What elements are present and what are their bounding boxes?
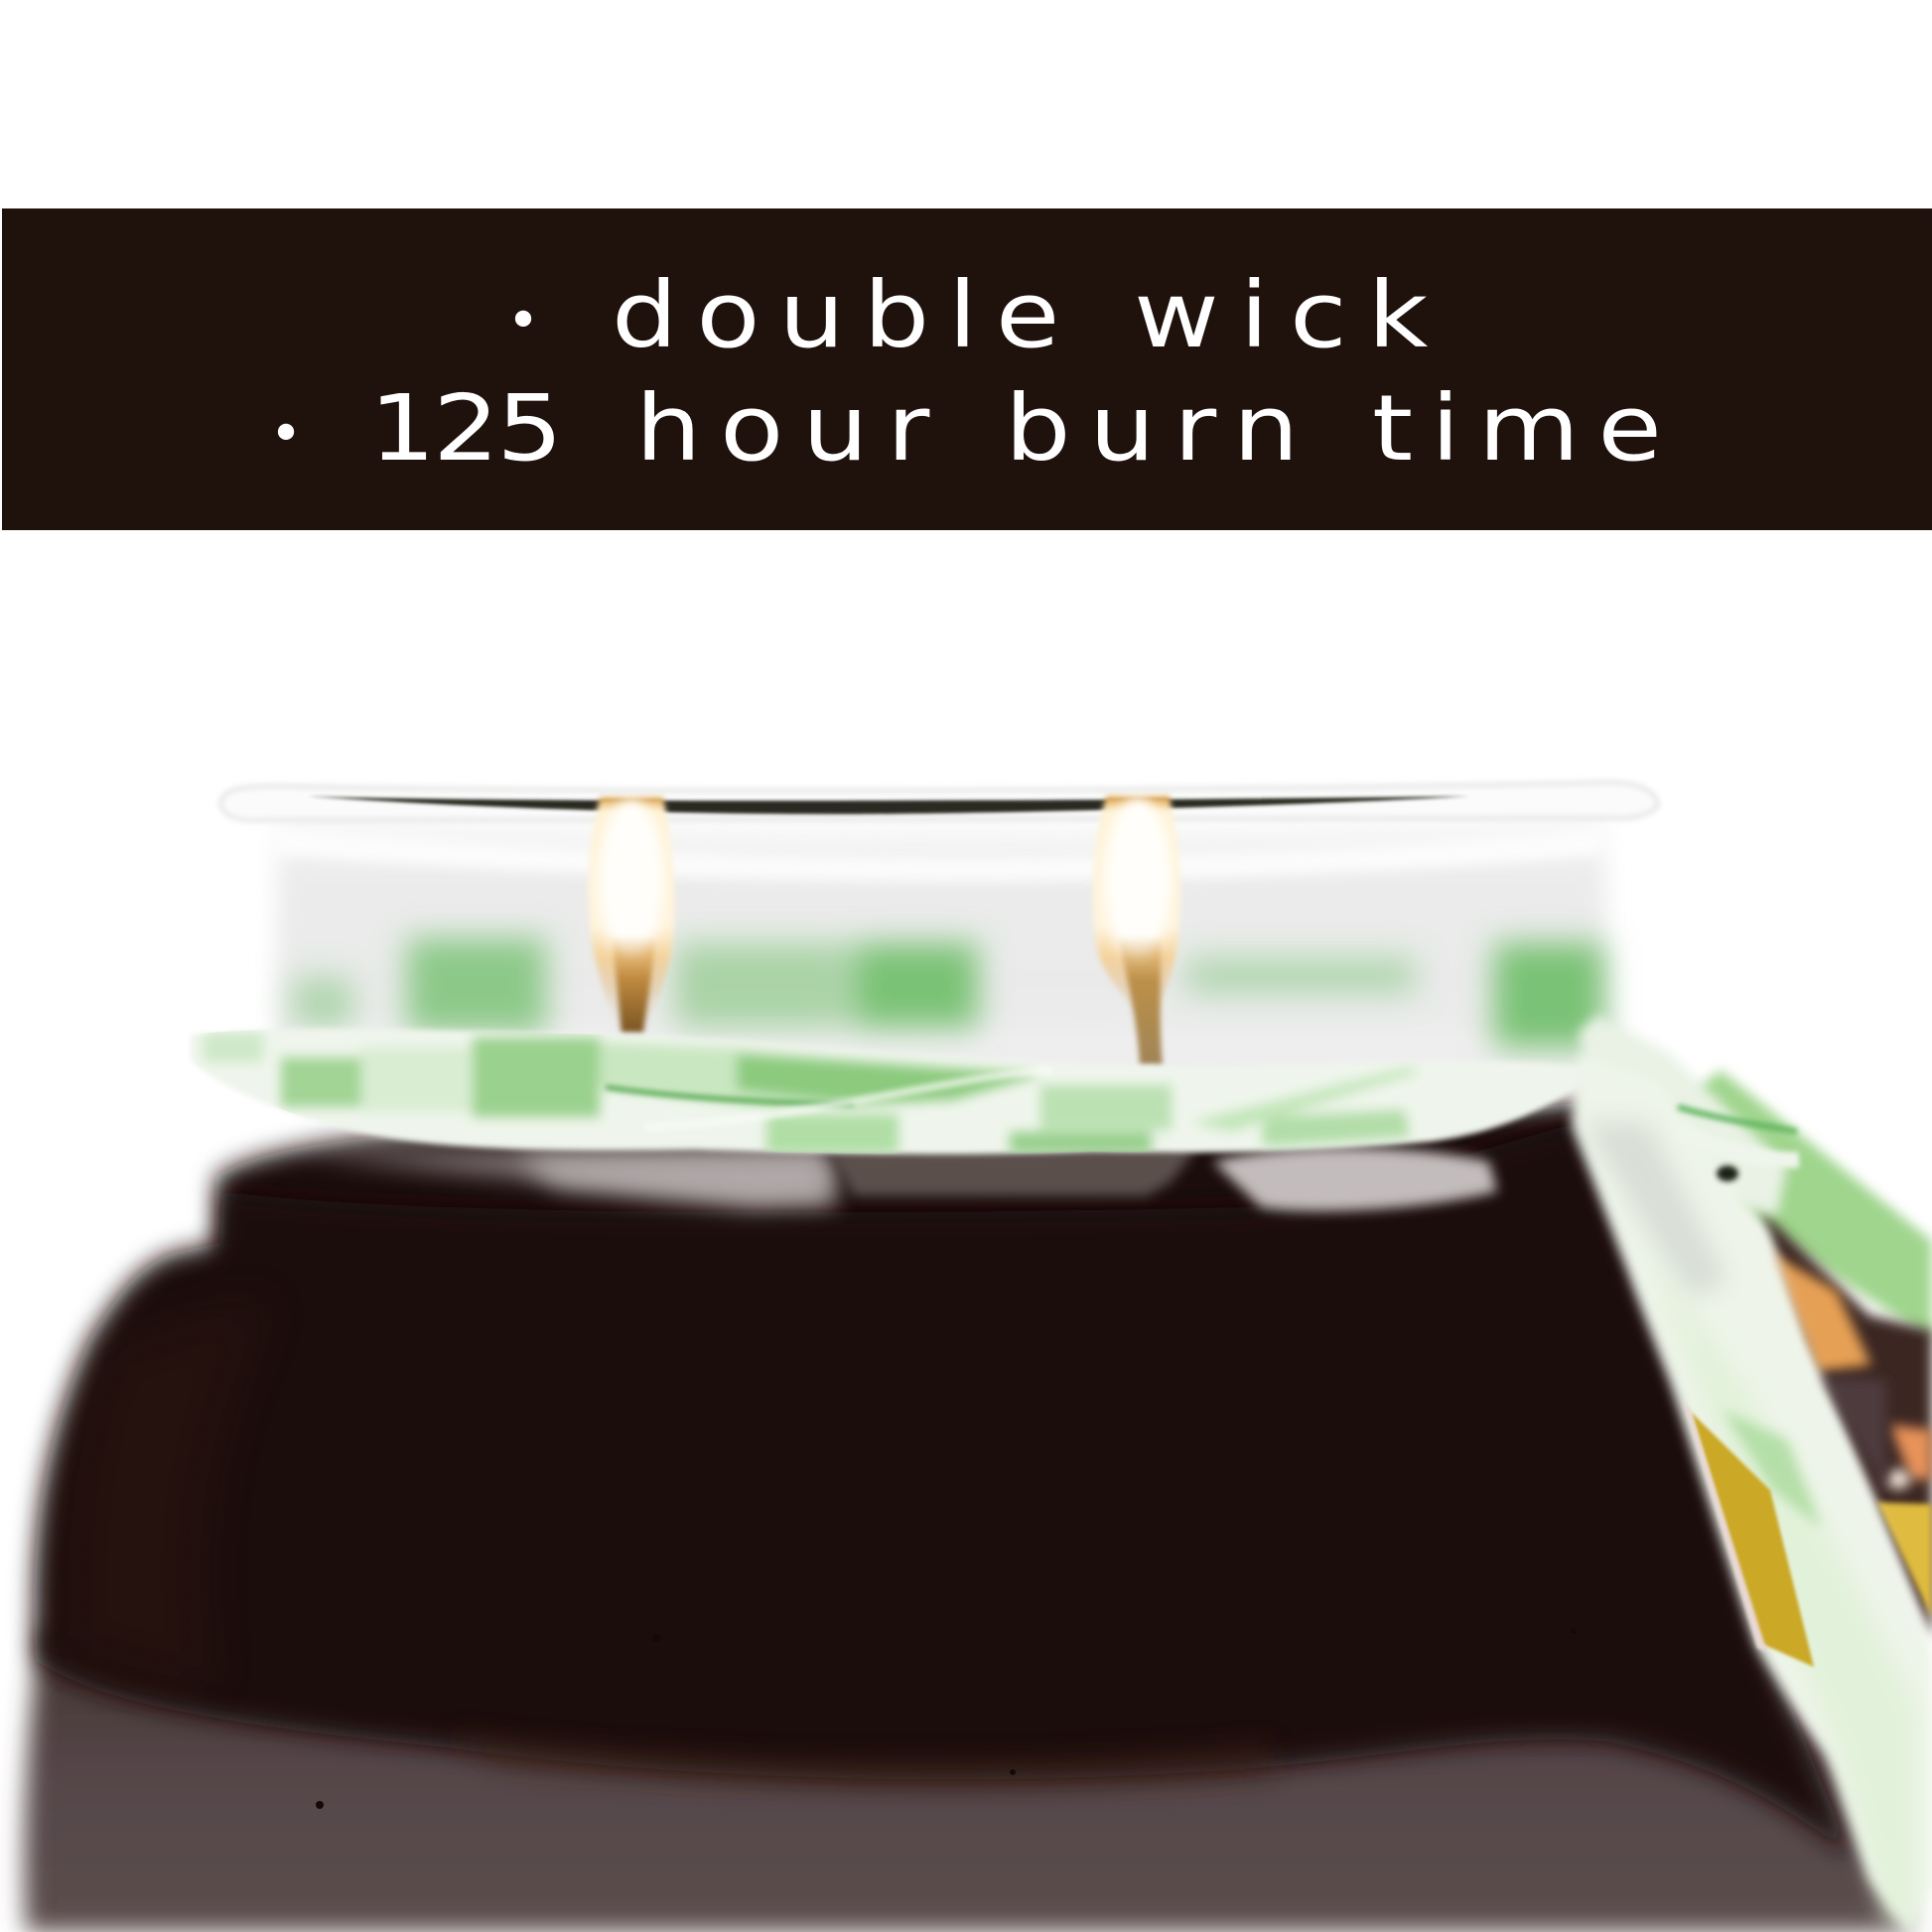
pale green tail tint xyxy=(1648,1251,1916,1932)
gingham ribbon band xyxy=(191,1029,1588,1155)
wax specks xyxy=(316,1628,1577,1809)
brown transition band xyxy=(447,1732,1271,1788)
jar body: dark wax xyxy=(34,1122,1852,1857)
green ribbon reflection xyxy=(293,938,1603,1047)
dark inner rim line xyxy=(308,796,1469,814)
header band xyxy=(2,208,1932,530)
jar neck xyxy=(216,1102,1628,1291)
brown shoulder tint xyxy=(68,1301,268,1688)
knot xyxy=(1579,1015,1787,1216)
candle photo xyxy=(24,782,1932,1932)
green tail panel xyxy=(1678,1070,1932,1340)
feature line: double wick: • xyxy=(506,289,540,353)
feature line: 125 hour burn time: time xyxy=(1372,375,1662,482)
feature line: 125 hour burn time: hour xyxy=(635,375,930,482)
ribbon tail and knot xyxy=(1572,1015,1932,1932)
knot shadow xyxy=(1717,1166,1738,1181)
neck highlights xyxy=(298,1142,1497,1211)
white strand at knot xyxy=(1678,1132,1799,1160)
feature line: double wick xyxy=(506,262,1428,368)
feature line: 125 hour burn time: 125 xyxy=(369,375,563,482)
white tail strip xyxy=(1572,1054,1932,1932)
flame and wick: left xyxy=(589,797,675,1033)
glass jar top xyxy=(220,782,1658,1092)
tail grey shading xyxy=(1584,1122,1727,1301)
jar body: lighter lower wax xyxy=(24,1628,1911,1932)
feature line: double wick: double xyxy=(612,262,1059,368)
feature line: 125 hour burn time: burn xyxy=(1005,375,1299,482)
yellow label edge xyxy=(1691,1412,1814,1667)
feature line: 125 hour burn time: • xyxy=(269,402,303,467)
feature line: 125 hour burn time xyxy=(269,375,1662,482)
feature line: double wick: wick xyxy=(1134,262,1428,368)
flame and wick: right xyxy=(1093,796,1180,1065)
product tag photo xyxy=(1757,1206,1932,1638)
